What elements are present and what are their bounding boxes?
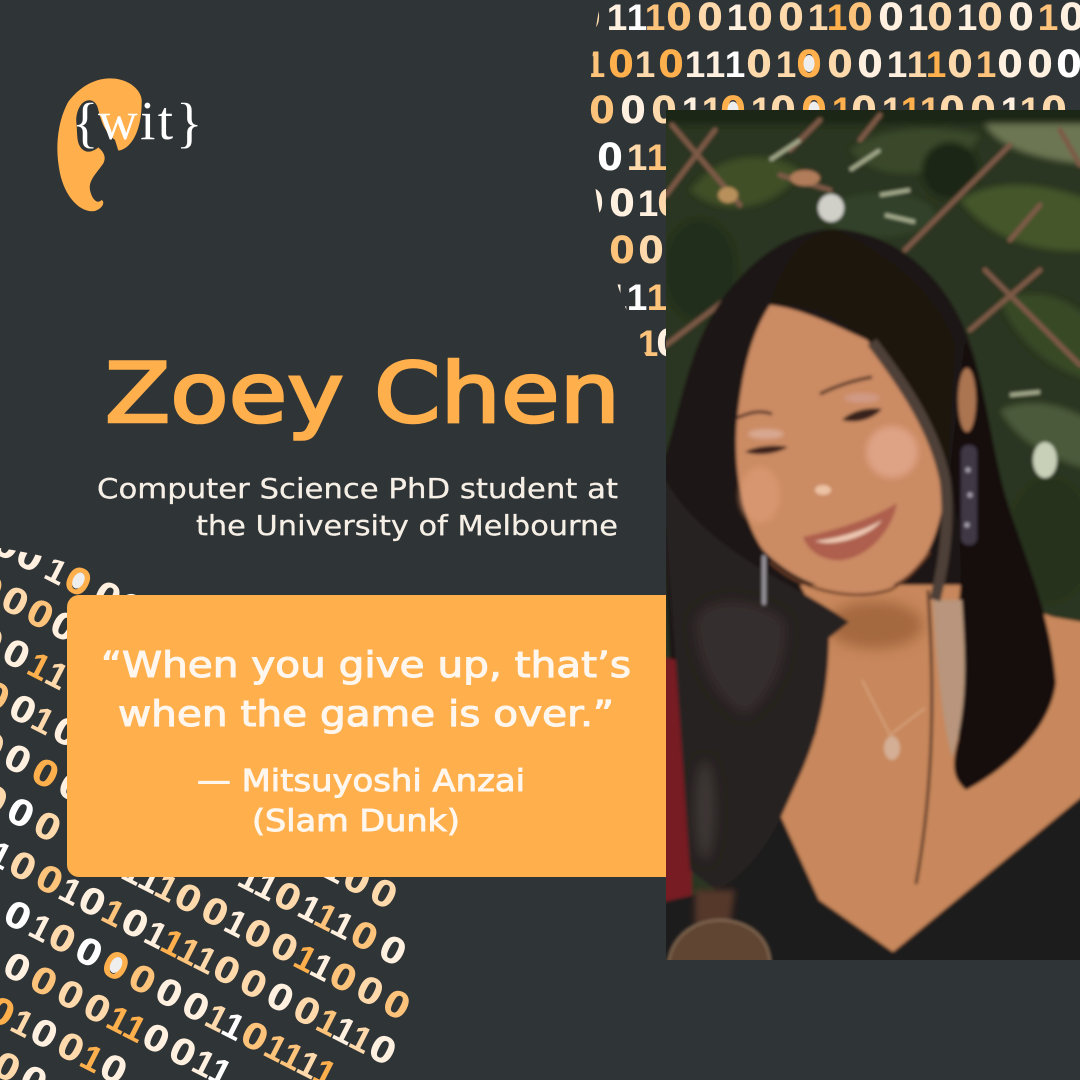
dress bbox=[666, 796, 1080, 960]
subtitle bbox=[97, 472, 618, 542]
quote text bbox=[101, 645, 631, 735]
quote attribution: — Mitsuyoshi Anzai bbox=[197, 764, 525, 799]
tan strands bbox=[933, 600, 965, 758]
subtitle: Computer Science PhD student at bbox=[97, 472, 618, 505]
binary pattern: top right: 111 bbox=[607, 277, 667, 318]
glass in foreground bbox=[668, 920, 770, 965]
subtitle: the University of Melbourne bbox=[196, 509, 618, 542]
pendant bbox=[884, 736, 900, 760]
filled zero accents bbox=[728, 55, 820, 110]
skin: neck and chest bbox=[781, 585, 1080, 952]
face bbox=[736, 305, 947, 594]
logo wordmark: wit bbox=[98, 90, 173, 151]
ear bbox=[958, 368, 976, 432]
logo wordmark: { bbox=[72, 92, 98, 153]
binary pattern: top right: 0001101001011100110 bbox=[589, 89, 1067, 132]
photo: portrait bbox=[666, 110, 1080, 960]
hair: back bbox=[666, 228, 1042, 660]
binary pattern: top right bbox=[575, 0, 1080, 365]
binary pattern: top right: 10101110100011101000 bbox=[585, 43, 1080, 86]
filled zero accents bbox=[72, 572, 122, 973]
binary pattern: top right: 10 bbox=[638, 322, 682, 365]
neck shadow bbox=[827, 601, 923, 649]
logo: wit bbox=[57, 78, 202, 211]
binary pattern: top right: 011 bbox=[597, 136, 667, 179]
earrings bbox=[762, 445, 977, 605]
brown hair end bbox=[695, 890, 735, 925]
photo background foliage bbox=[666, 110, 1080, 896]
red garment bbox=[666, 656, 694, 904]
quote text: “When you give up, that’s bbox=[101, 645, 631, 686]
quote attribution: (Slam Dunk) bbox=[252, 804, 460, 839]
binary pattern: top right: 0010 bbox=[578, 182, 683, 225]
binary pattern: top right: 00 bbox=[609, 229, 664, 272]
face details bbox=[737, 377, 930, 595]
title: name: Zoey Chen bbox=[105, 345, 620, 442]
quote panel bbox=[67, 595, 666, 877]
quote attribution bbox=[197, 764, 525, 839]
hair over forehead bbox=[770, 229, 955, 467]
right hair lock bbox=[950, 340, 1056, 790]
necklace bbox=[862, 680, 925, 735]
logo wordmark bbox=[72, 90, 202, 153]
quote text: when the game is over.” bbox=[118, 694, 614, 735]
face-framing strand bbox=[872, 342, 947, 600]
logo wordmark: } bbox=[176, 92, 202, 153]
hair highlights bbox=[695, 601, 786, 860]
binary pattern: bottom left bbox=[0, 548, 409, 1080]
left hair bbox=[660, 470, 849, 890]
dark strand bbox=[916, 590, 932, 884]
